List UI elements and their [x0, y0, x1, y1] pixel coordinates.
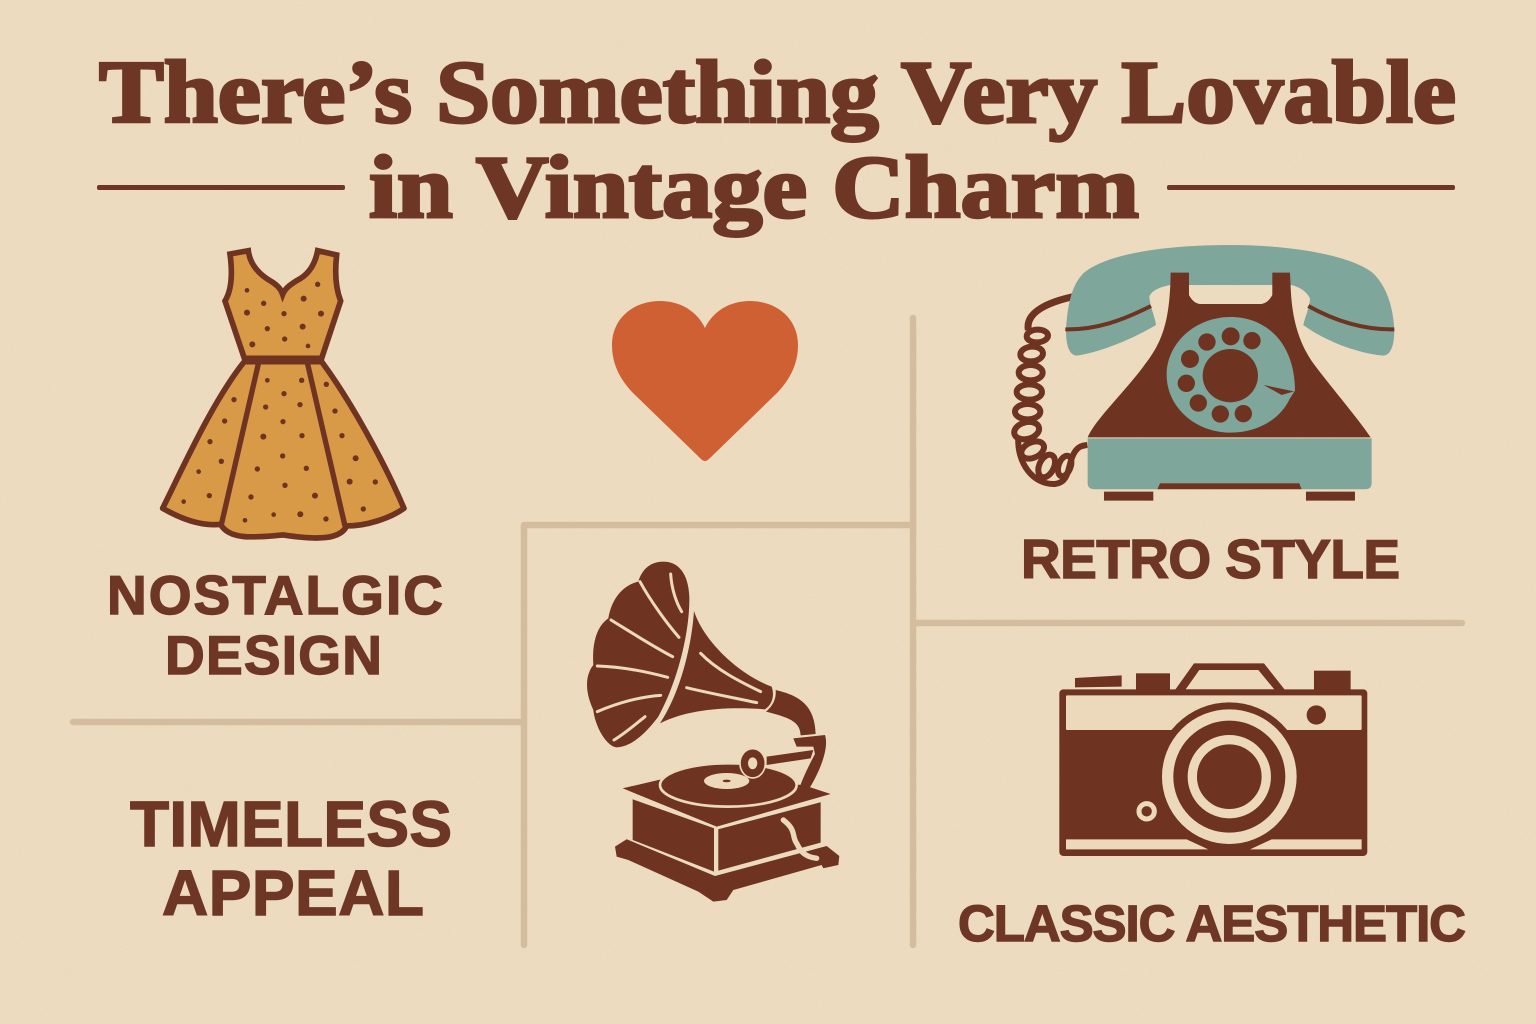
- label: nostalgic design: DESIGN: [165, 624, 382, 686]
- label: nostalgic design: NOSTALGIC: [107, 564, 443, 626]
- icon: dress: [163, 251, 404, 538]
- label: classic aesthetic: CLASSIC AESTHETIC: [958, 895, 1466, 952]
- icon: rotary telephone: [1012, 245, 1394, 501]
- icon: heart: [612, 301, 798, 461]
- icon: gramophone: [587, 562, 839, 902]
- title: in Vintage Charm: [369, 139, 1139, 237]
- icon: camera: [1059, 663, 1367, 856]
- label: timeless appeal: [130, 788, 452, 929]
- label: timeless appeal: APPEAL: [162, 857, 424, 929]
- label: retro style: RETRO STYLE: [1021, 528, 1400, 590]
- label: nostalgic design: [107, 564, 443, 686]
- label: timeless appeal: TIMELESS: [130, 788, 452, 860]
- title: There’s Something Very Lovable: [99, 44, 1456, 142]
- title: [97, 44, 1456, 237]
